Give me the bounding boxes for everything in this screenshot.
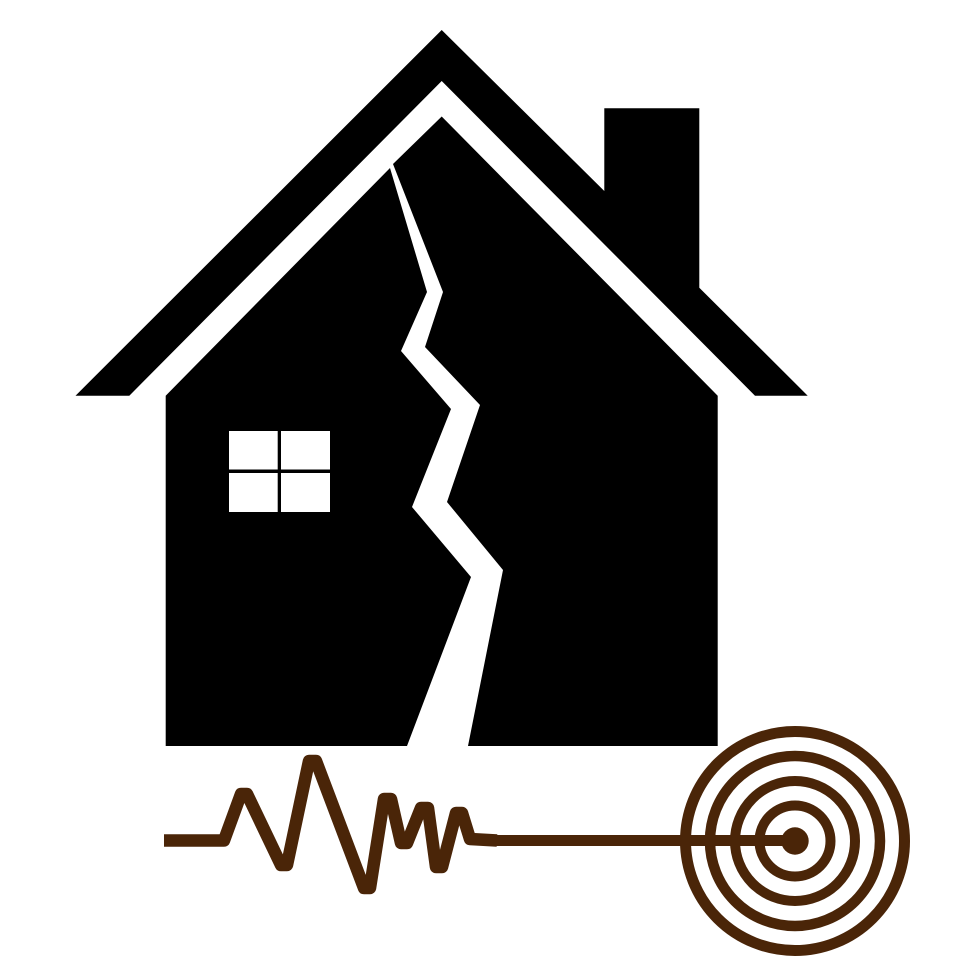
icon: roof and chimney [76, 30, 808, 396]
icon: window [229, 431, 330, 512]
icon: seismograph wave [164, 761, 795, 888]
icon: house body with crack [166, 116, 718, 746]
icon: epicenter target [686, 732, 904, 950]
